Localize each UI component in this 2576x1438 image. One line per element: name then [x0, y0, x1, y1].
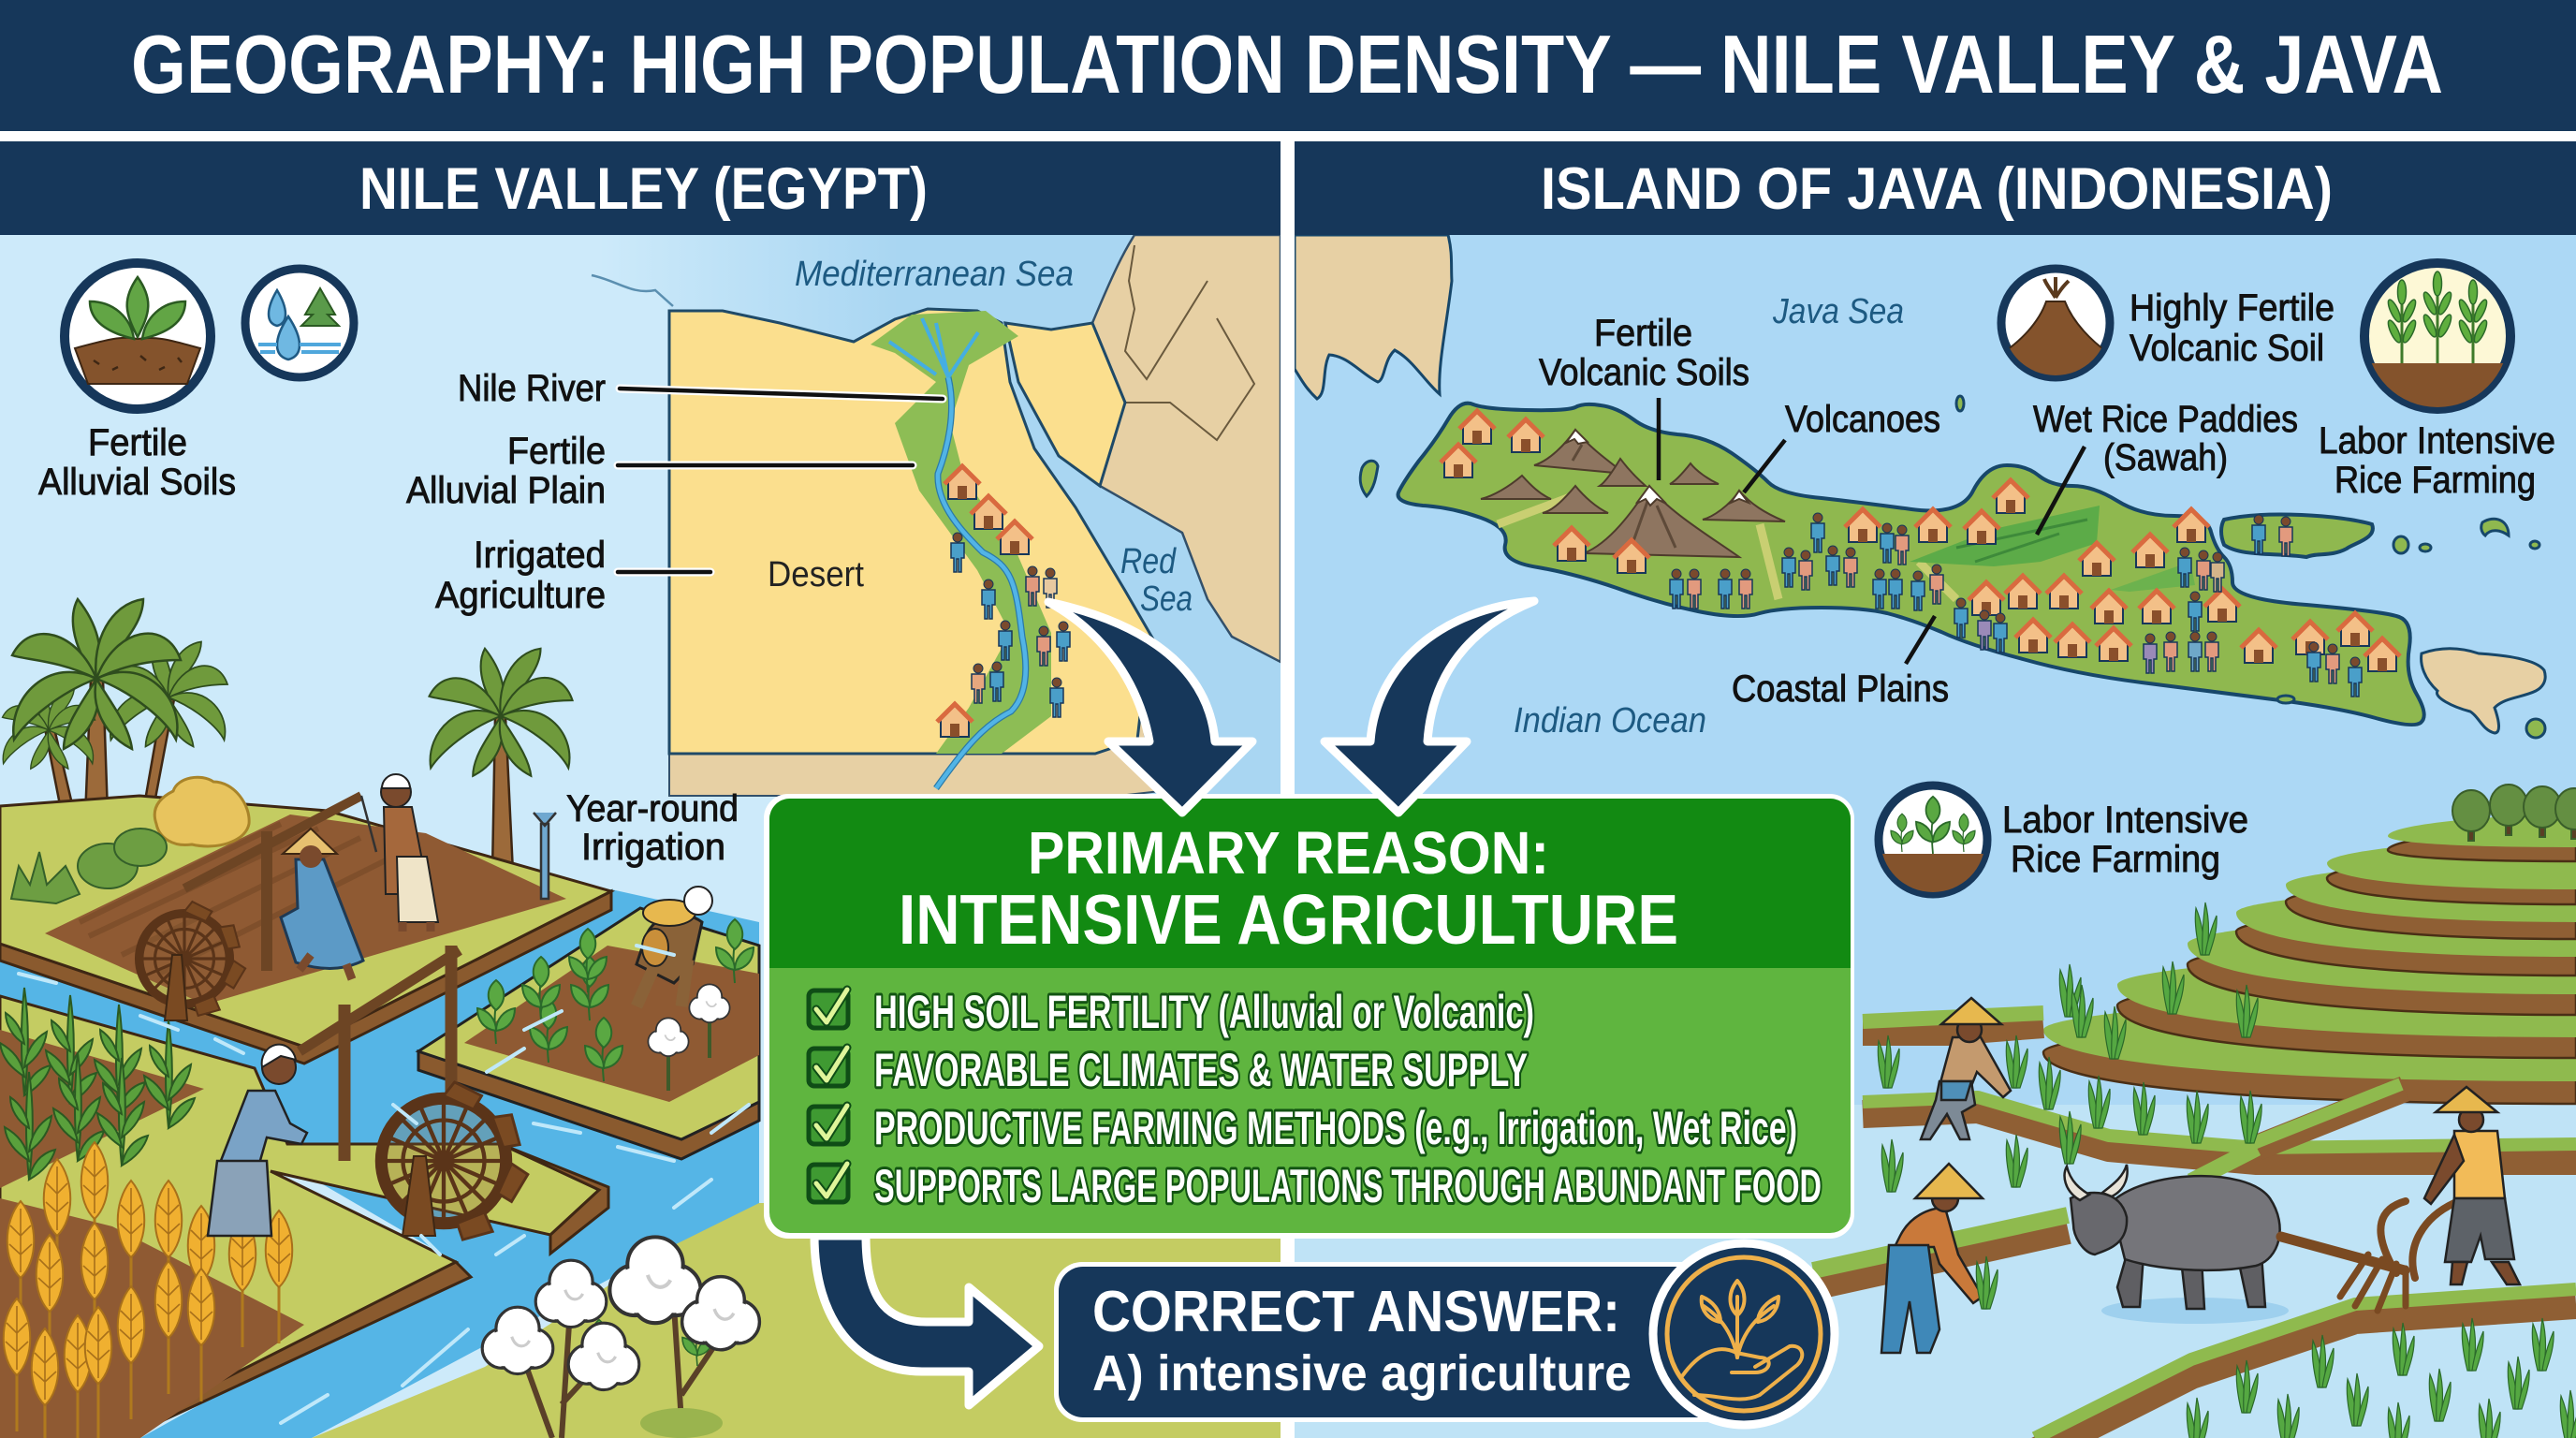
- label: Wet Rice Paddies: Wet Rice Paddies: [2033, 399, 2298, 440]
- checklist: [809, 986, 1822, 1212]
- heading: correct answer: CORRECT ANSWER:: [1092, 1280, 1620, 1344]
- icon: hand holding wheat: [1653, 1243, 1835, 1425]
- label: Desert: Desert: [768, 555, 864, 594]
- label: Irrigated Agriculture: Agriculture: [435, 575, 606, 616]
- icon: rice plants: [2359, 263, 2518, 419]
- sea label: Red Sea: Red: [1120, 542, 1178, 581]
- heading: primary reason: PRIMARY REASON:: [1028, 819, 1549, 887]
- water wheel: lower: [381, 1082, 528, 1240]
- farmer: woman planting: [208, 946, 460, 1236]
- farm landscape: water channels: [0, 889, 759, 1438]
- label: Labor Intensive Rice Farming (upper): [2319, 420, 2555, 501]
- label: Year-round Irrigation: Irrigation: [581, 827, 725, 868]
- label: Volcanoes: Volcanoes: [1785, 399, 1940, 440]
- rural houses: [1441, 411, 2400, 671]
- label: Irrigated Agriculture: [435, 535, 606, 616]
- label: Fertile Volcanic Soils: Volcanic Soils: [1539, 352, 1749, 393]
- label: Labor Intensive Rice Farming (upper): Labor Intensive: [2319, 420, 2555, 462]
- icon: seedlings: [1872, 785, 1994, 901]
- label: Irrigated Agriculture: Irrigated: [474, 535, 606, 576]
- plough: [2281, 1201, 2454, 1311]
- wheat stalks: [4, 1142, 292, 1438]
- corn plants: [0, 988, 195, 1180]
- label: Labor Intensive Rice Farming (lower): Labor Intensive: [2002, 800, 2248, 841]
- arrow: Java to primary reason: [1325, 601, 1534, 813]
- leader lines: Nile labels: [618, 389, 943, 572]
- arrow: Nile to primary reason: [1048, 602, 1252, 813]
- label: Highly Fertile Volcanic Soil: Volcanic Soil: [2130, 328, 2324, 369]
- label: Wet Rice Paddies: (Sawah): [2103, 437, 2228, 478]
- label: Labor Intensive Rice Farming (lower): [2002, 800, 2248, 880]
- checklist: SUPPORTS LARGE POPULATIONS THROUGH ABUNDANT FOOD: [874, 1160, 1822, 1212]
- title banner: [0, 0, 2576, 131]
- farmer: ploughing: [2424, 1087, 2520, 1284]
- answer text: A) intensive agriculture: [1092, 1345, 1632, 1401]
- label: Fertile Alluvial Plain: [406, 436, 605, 504]
- panel: Nile Valley: [0, 235, 1281, 1438]
- volcanoes: [1481, 430, 1785, 557]
- farmer: planting upper: [1921, 998, 2011, 1139]
- label: Highly Fertile Volcanic Soil: Highly Fertile: [2130, 287, 2334, 329]
- leader lines: Java labels: [1659, 398, 2085, 664]
- rice seedlings: [1878, 902, 2576, 1438]
- panel: primary reason: [764, 794, 1854, 1239]
- cotton plants: [482, 1237, 759, 1438]
- sea label: Red Sea: Sea: [1140, 580, 1193, 619]
- label: Nile River: Nile River: [458, 368, 606, 409]
- label: Fertile Alluvial Soils: [37, 427, 236, 495]
- label: Fertile Alluvial Plain: Fertile: [507, 431, 606, 472]
- label: Fertile Alluvial Plain: Alluvial Plain: [406, 470, 606, 511]
- panel heading: Nile Valley: NILE VALLEY (EGYPT): [359, 156, 928, 222]
- arrow: to correct answer: [814, 1236, 1039, 1405]
- field: upper island with soil: [0, 777, 611, 1064]
- terraced rice hill: [2043, 785, 2576, 1104]
- label: Year-round Irrigation: [566, 788, 739, 868]
- panel: Java: [1295, 235, 2576, 1438]
- farmer: bending: [637, 887, 712, 1006]
- map: Egypt: [592, 235, 1281, 796]
- heading: intensive agriculture: INTENSIVE AGRICULTURE: [899, 880, 1678, 959]
- field: cotton meadow: [312, 1203, 1281, 1438]
- panel heading: Java: [1295, 141, 2576, 235]
- field: lower left with crops: [0, 996, 608, 1438]
- label: Coastal Plains: Coastal Plains: [1732, 668, 1949, 710]
- label: Fertile Volcanic Soils: Fertile: [1594, 313, 1692, 354]
- paddy dikes: [1813, 1013, 2576, 1438]
- label: Labor Intensive Rice Farming (upper): Rice Farming: [2334, 460, 2536, 501]
- irrigation pipe: [534, 813, 556, 899]
- water wheel: upper: [139, 902, 245, 1020]
- label: Fertile Alluvial Soils: Alluvial Soils: [38, 462, 236, 503]
- palm trees: [2, 599, 572, 873]
- checklist: FAVORABLE CLIMATES & WATER SUPPLY: [874, 1044, 1528, 1096]
- map: Java island: [1360, 396, 2545, 738]
- checklist: PRODUCTIVE FARMING METHODS (e.g., Irrigation, Wet Rice): [874, 1102, 1797, 1154]
- panel: correct answer: [1054, 1243, 1835, 1425]
- label: Fertile Alluvial Soils: Fertile: [88, 422, 187, 463]
- water ripples: [19, 946, 749, 1423]
- field: right island with cotton: [418, 908, 759, 1159]
- land: Sumatra: [1295, 235, 1452, 399]
- icon: water and tree: [245, 269, 354, 377]
- icon: soil with plant: [65, 263, 211, 409]
- population figures: [1670, 513, 2362, 697]
- farmer: planting lower: [1881, 1164, 1998, 1353]
- Nile settlements: [937, 466, 1070, 737]
- sea label: Mediterranean: Mediterranean Sea: [795, 255, 1074, 294]
- sea label: Indian Ocean: Indian Ocean: [1514, 701, 1706, 741]
- land: Bali: [2422, 649, 2545, 733]
- label: Year-round Irrigation: Year-round: [566, 788, 739, 829]
- water buffalo: [2065, 1165, 2289, 1324]
- panel heading: Nile Valley: [0, 141, 1281, 235]
- sea label: Java Sea: Java Sea: [1772, 292, 1904, 331]
- checklist: HIGH SOIL FERTILITY (Alluvial or Volcanic): [874, 986, 1534, 1038]
- label: Labor Intensive Rice Farming (lower): Rice Farming: [2011, 839, 2220, 880]
- label: Fertile Volcanic Soils: [1539, 313, 1749, 393]
- sea label: Red Sea: [1121, 547, 1192, 610]
- panel heading: Java: ISLAND OF JAVA (INDONESIA): [1541, 156, 2333, 222]
- label: Highly Fertile Volcanic Soil: [2130, 287, 2334, 369]
- label: Wet Rice Paddies: [2033, 399, 2298, 478]
- farmers with shadoof: [184, 774, 438, 979]
- icon: volcano: [2001, 269, 2110, 384]
